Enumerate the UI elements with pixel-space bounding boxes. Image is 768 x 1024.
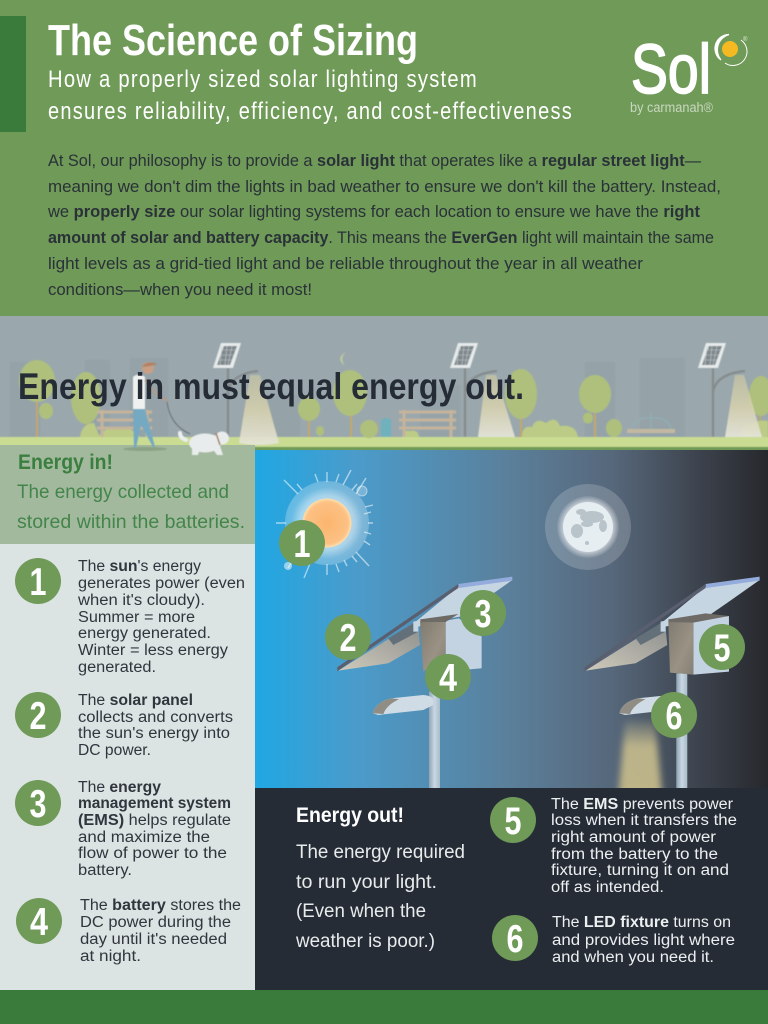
diagram badges: 2	[340, 617, 356, 660]
step 3	[15, 779, 231, 879]
step 4: The battery stores the	[80, 897, 241, 914]
step 4: DC power during the	[80, 914, 231, 931]
step 2: collects and converts	[78, 709, 233, 726]
step 1: when it's cloudy).	[77, 592, 205, 609]
step 1	[15, 558, 245, 676]
step 1: Winter = less energy	[78, 642, 228, 659]
intro text block: amount of solar and battery capacity. This means the EverGen light will maintain the same	[48, 229, 714, 247]
energy out description: weather is poor.)	[295, 931, 435, 952]
step 4	[16, 897, 241, 965]
step 2: DC power.	[78, 742, 151, 759]
panel: park banner	[0, 316, 768, 447]
heading: energy equation: Energy in must equal energy out.	[18, 366, 524, 407]
heading: energy out: Energy out!	[296, 804, 404, 827]
logo: Sol by carmanah: by carmanah®	[630, 100, 713, 115]
diagram badges: 1	[294, 523, 310, 566]
fountain	[627, 413, 675, 433]
step 6: The LED fixture turns on	[552, 914, 731, 931]
energy out description	[295, 842, 465, 952]
bushes	[80, 420, 768, 437]
step 3: and maximize the	[78, 829, 210, 846]
step 5: fixture, turning it on and	[551, 862, 729, 879]
icon: moon	[545, 484, 631, 570]
step 3: 3	[30, 783, 46, 826]
ground	[0, 437, 768, 447]
solar street lights	[213, 343, 762, 445]
energy in description	[17, 481, 245, 533]
step 4: day until it's needed	[80, 931, 227, 948]
icon: sun	[276, 470, 373, 578]
step 1: 1	[30, 561, 46, 604]
intro text block	[47, 152, 721, 299]
step 6: and provides light where	[552, 932, 735, 949]
step 5: off as intended.	[551, 879, 664, 896]
solar light: night	[585, 577, 760, 797]
trees	[19, 360, 768, 438]
step 2: 2	[30, 695, 46, 738]
panel: energy in	[0, 445, 255, 544]
panel: energy in steps	[0, 544, 255, 990]
energy out description: (Even when the	[296, 901, 426, 922]
trash bin	[381, 418, 391, 437]
step 5	[490, 796, 737, 896]
diagram badges: 4	[439, 657, 457, 700]
intro text block: meaning we don't dim the lights in bad weather to ensure we don't kill the battery. Instead,	[48, 178, 721, 196]
step 3: management system	[78, 795, 231, 812]
subtitle	[48, 66, 573, 125]
step 1: Summer = more	[78, 609, 195, 626]
step 5: from the battery to the	[551, 846, 718, 863]
intro text block: we properly size our solar lighting systems for each location to ensure we have the right	[47, 203, 700, 221]
step 6: 6	[506, 918, 524, 961]
energy in description: The energy collected and	[17, 481, 229, 503]
step 1: generated.	[78, 659, 156, 676]
step 6	[492, 914, 735, 966]
intro text block: conditions—when you need it most!	[48, 281, 312, 299]
diagram badges: 3	[474, 593, 492, 636]
step 3: battery.	[78, 862, 132, 879]
step 1: generates power (even	[78, 575, 245, 592]
diagram badges	[279, 520, 745, 738]
step 1: energy generated.	[78, 625, 211, 642]
energy in description: stored within the batteries.	[17, 511, 245, 533]
step 4: at night.	[80, 948, 141, 965]
step 5: 5	[504, 800, 522, 843]
step 4: 4	[30, 901, 48, 944]
heading: energy in: Energy in!	[18, 451, 113, 474]
panel: header background	[0, 0, 768, 316]
step 6: and when you need it.	[552, 949, 714, 966]
panel: day to night illustration	[255, 450, 768, 797]
crescent moon	[340, 352, 346, 366]
benches	[97, 410, 456, 437]
footer bar	[0, 990, 768, 1024]
step 3: The energy	[78, 779, 161, 796]
subtitle: How a properly sized solar lighting system	[48, 66, 478, 93]
step 5: right amount of power	[551, 829, 716, 846]
intro text block: At Sol, our philosophy is to provide a solar light that operates like a regular street light—	[48, 152, 701, 170]
title: The Science of Sizing	[48, 16, 418, 65]
energy out description: The energy required	[296, 842, 465, 863]
dog and leash	[167, 402, 229, 455]
step 5: The EMS prevents power	[551, 796, 733, 813]
subtitle: ensures reliability, efficiency, and cost-effectiveness	[48, 98, 573, 125]
step 3: (EMS) helps regulate	[78, 812, 231, 829]
step 2: The solar panel	[78, 692, 193, 709]
person walking	[123, 362, 168, 451]
step 3: flow of power to the	[78, 845, 227, 862]
diagram badges: 6	[666, 695, 682, 738]
accent bar	[0, 16, 26, 132]
step 1: The sun's energy	[78, 558, 201, 575]
solar light: day	[337, 577, 512, 790]
logo: Sol by carmanah: Sol	[631, 30, 711, 108]
step 2	[15, 692, 233, 759]
intro text block: light levels as a grid-tied light and be reliable throughout the year in all weather	[48, 255, 644, 273]
energy out description: to run your light.	[296, 872, 437, 893]
diagram badges: 5	[714, 627, 730, 670]
step 5: loss when it transfers the	[551, 812, 737, 829]
panel: energy out	[255, 788, 768, 990]
step 2: the sun's energy into	[78, 725, 230, 742]
logo: Sol by carmanah: ®	[743, 36, 748, 43]
